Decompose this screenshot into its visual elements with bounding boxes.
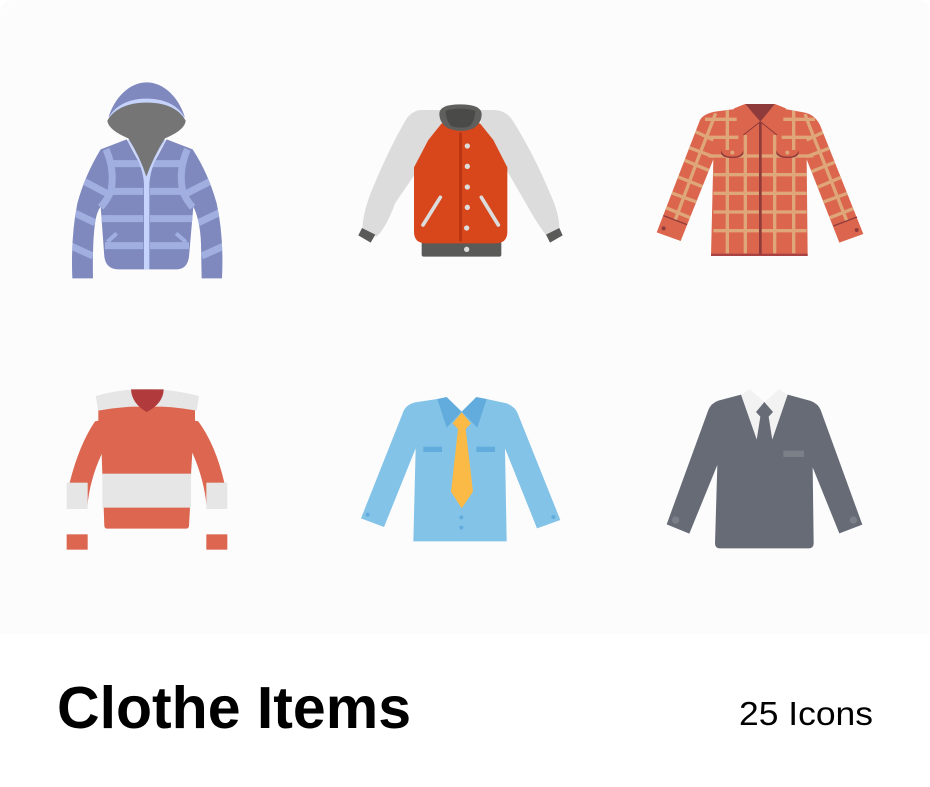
icon count label: 25 Icons — [739, 695, 873, 732]
icon: grey suit jacket with white collar and tie — [667, 389, 862, 548]
icon: red and white striped sweater — [67, 389, 227, 550]
icon: blue hooded puffer jacket — [67, 82, 228, 278]
icon: blue dress shirt with yellow tie — [361, 397, 560, 541]
icon: red plaid flannel shirt — [657, 104, 863, 256]
title: Clothe Items — [57, 675, 411, 741]
icon: orange varsity jacket — [358, 104, 563, 257]
